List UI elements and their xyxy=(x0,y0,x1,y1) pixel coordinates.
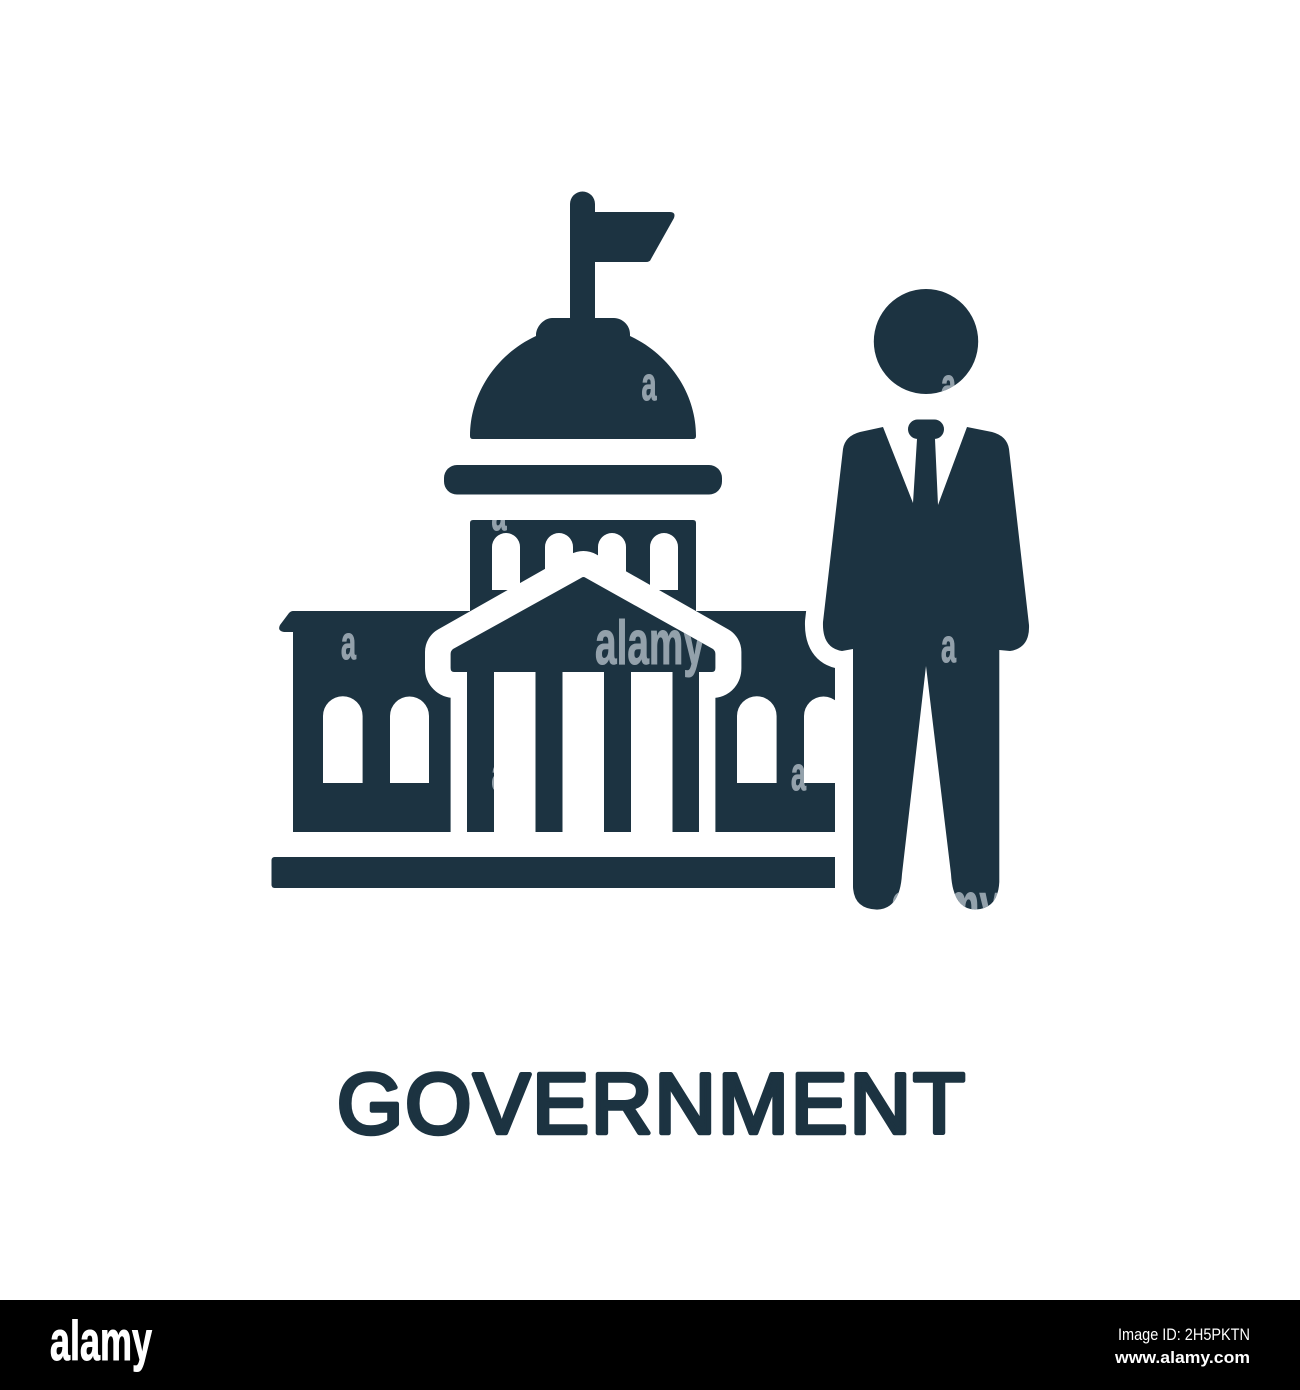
white halo around portico xyxy=(451,577,715,672)
watermark: left wing: a xyxy=(341,616,356,669)
flag on pole xyxy=(570,192,674,325)
right wing xyxy=(600,611,860,832)
watermark letters on icon xyxy=(341,357,1001,940)
footer logo: alamy xyxy=(50,1309,152,1372)
head xyxy=(874,289,978,394)
watermark: suit: a xyxy=(941,619,956,672)
icon: capitol building xyxy=(272,192,862,888)
website: www.alamy.com xyxy=(1114,1348,1250,1367)
watermark: dome: a xyxy=(642,357,657,410)
watermark: right wing: a xyxy=(791,747,806,800)
watermark: center logo: alamy xyxy=(595,609,705,678)
white halo around man xyxy=(823,427,1029,910)
title: GOVERNMENT xyxy=(337,1057,965,1152)
icon: man in suit xyxy=(823,289,1029,910)
watermark: column: a xyxy=(492,747,507,800)
tie knot xyxy=(908,420,944,439)
watermark: head: a xyxy=(941,358,956,411)
drum with arched windows xyxy=(470,520,696,640)
dome band xyxy=(444,465,722,494)
dome xyxy=(470,318,696,439)
portico pediment xyxy=(451,577,715,672)
footer bar xyxy=(0,1300,1300,1390)
portico columns xyxy=(467,672,699,832)
icon: government building and official xyxy=(272,192,1029,910)
watermark: drum: a xyxy=(492,487,507,540)
building base xyxy=(272,857,862,888)
suit body and legs xyxy=(823,427,1029,910)
watermark: feet logo: alamy xyxy=(891,871,1001,940)
left wing xyxy=(279,611,560,832)
image id: Image ID: 2H5PKTN xyxy=(1118,1325,1250,1344)
